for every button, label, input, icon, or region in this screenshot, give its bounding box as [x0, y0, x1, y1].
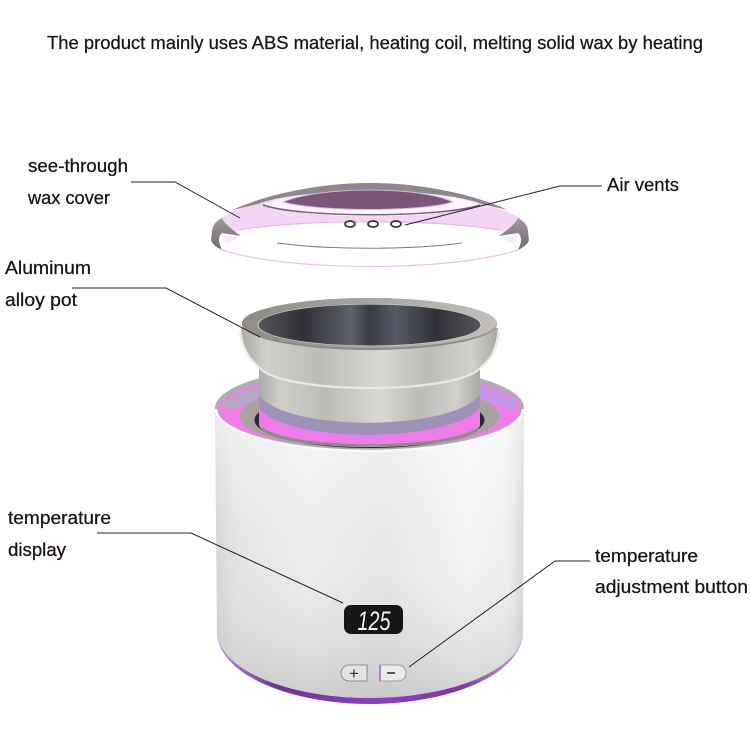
plus button: +	[349, 664, 359, 683]
label: air vents	[405, 175, 679, 225]
label: see-through wax cover: see-through	[28, 156, 128, 176]
label: temperature display: display	[8, 540, 66, 560]
label: see-through wax cover: wax cover	[27, 188, 110, 208]
label: see-through wax cover	[27, 156, 240, 218]
label: aluminum alloy pot: alloy pot	[5, 290, 77, 310]
label: aluminum alloy pot: Aluminum	[5, 258, 91, 278]
aluminum pot	[240, 298, 499, 447]
minus button	[380, 665, 406, 681]
label: temperature display: temperature	[8, 508, 111, 528]
label: temperature adjustment button: temperature	[595, 546, 698, 566]
cylindrical white body	[215, 366, 524, 704]
label: temperature adjustment button: adjustment button	[595, 577, 748, 597]
air vent holes	[345, 221, 401, 227]
label: temperature display	[8, 508, 343, 603]
label: air vents: Air vents	[607, 175, 679, 195]
glass lid	[211, 183, 529, 266]
title: The product mainly uses ABS material, heating coil, melting solid wax by heating	[47, 33, 703, 53]
label: aluminum alloy pot	[5, 258, 260, 337]
wax warmer product	[211, 183, 529, 704]
temperature display: 125	[358, 606, 391, 636]
plus button	[341, 664, 367, 683]
label: temperature adjustment button	[409, 546, 748, 667]
